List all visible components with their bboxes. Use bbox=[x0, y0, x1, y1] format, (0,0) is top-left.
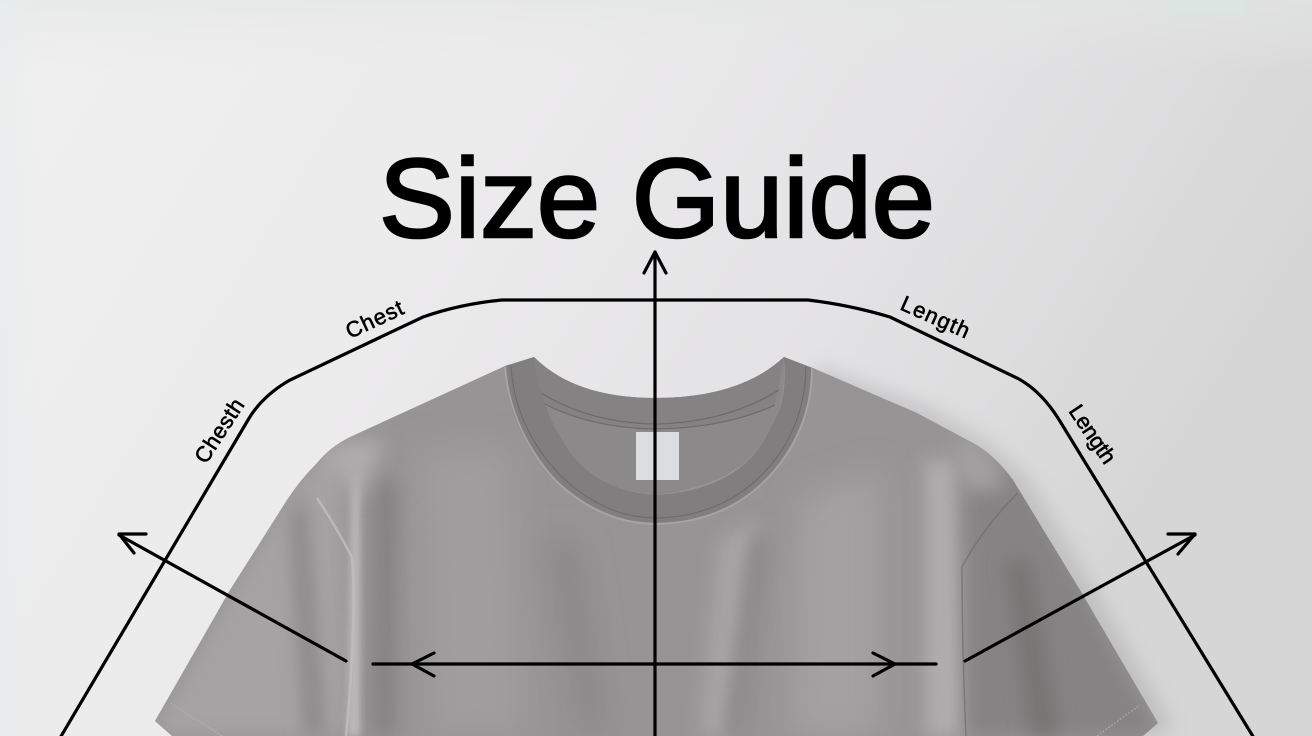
sleeve hem stitching bbox=[170, 703, 1140, 736]
left sleeve seam bbox=[317, 498, 354, 736]
vertical arrow bbox=[644, 252, 666, 736]
front collar band bbox=[505, 357, 812, 523]
t-shirt bbox=[150, 357, 1160, 736]
label: chesth: Chesth bbox=[189, 394, 249, 468]
right sleeve seam bbox=[962, 493, 1018, 736]
label: length side: Length bbox=[1064, 400, 1121, 469]
fabric folds bbox=[150, 430, 1160, 736]
label: chest: Chest bbox=[342, 295, 407, 344]
label: length top: Length bbox=[897, 291, 974, 343]
shirt shadow bbox=[800, 366, 1172, 736]
curved measurement line left and top and right bbox=[60, 300, 1254, 736]
left diagonal arrow bbox=[119, 534, 346, 661]
inside of neck bbox=[534, 357, 784, 495]
neck label tag bbox=[636, 432, 679, 480]
right diagonal arrow bbox=[965, 534, 1195, 661]
horizontal double arrow bbox=[373, 653, 936, 676]
shirt body bbox=[155, 357, 1158, 736]
title: Size Guide bbox=[379, 136, 935, 261]
collar edge stitching bbox=[505, 366, 812, 524]
collar stitching bbox=[541, 390, 779, 429]
back collar band bbox=[534, 357, 784, 429]
